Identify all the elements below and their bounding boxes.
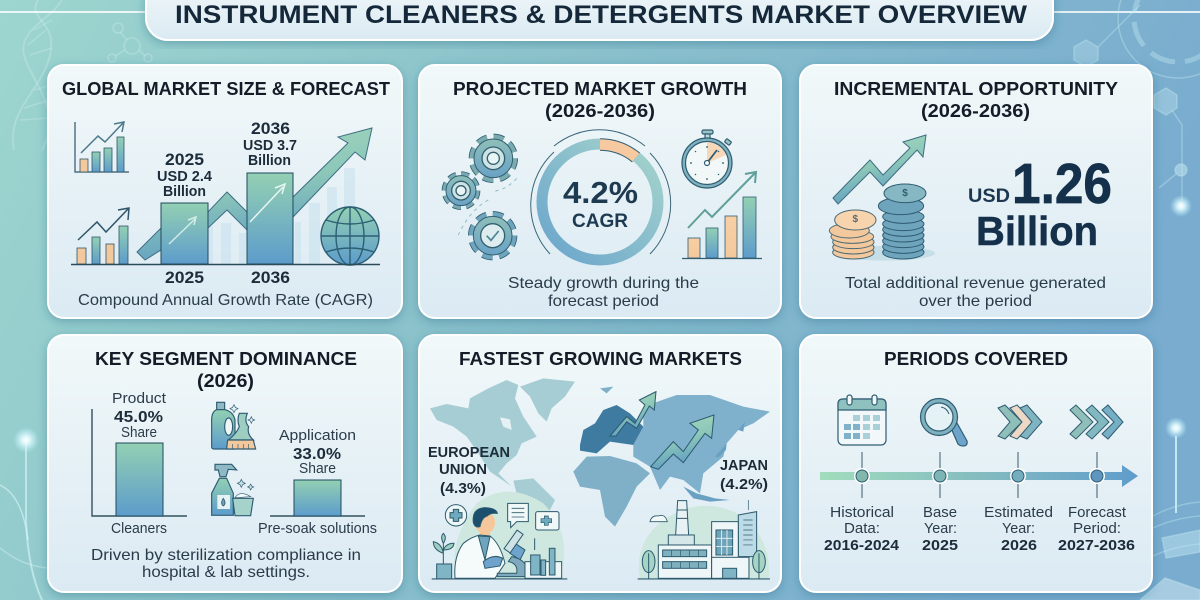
world map [430, 378, 770, 530]
icon: chevrons estimated [998, 405, 1042, 439]
bar chart: application share: Pre-soak solutions [258, 520, 377, 537]
label: European Union: EUROPEAN [428, 444, 510, 461]
axis baseline [71, 264, 380, 266]
icon: coin stacks [829, 184, 935, 261]
icon: globe [321, 207, 379, 265]
label: 2025 value: Billion [163, 183, 206, 200]
label: estimated year: Estimated [984, 504, 1053, 521]
label: forecast period: Forecast [1068, 504, 1127, 521]
label: 2036 value: Billion [248, 152, 291, 169]
heading: (2026-2036) [545, 100, 655, 121]
label: base year: Year: [924, 520, 957, 537]
value: 4.2% CAGR: 4.2% [563, 175, 638, 210]
heading: (2026) [197, 370, 254, 391]
heading: (2026-2036) [921, 100, 1030, 121]
label: forecast period [1058, 504, 1135, 554]
panel: periods covered [800, 335, 1152, 592]
bar 2036 [247, 173, 293, 264]
illustration: factory and city [638, 500, 770, 579]
background decoration: circuit and molecules, right side [1074, 0, 1200, 600]
label: historical data: 2016-2024 [824, 537, 900, 554]
axis labels: 2025 [165, 268, 204, 287]
heading [453, 78, 747, 121]
heading: PROJECTED MARKET GROWTH [453, 78, 747, 99]
label: historical data: Data: [844, 520, 880, 537]
title banner [146, 0, 1053, 40]
value: USD 1.26 Billion [968, 152, 1112, 254]
bar chart: application share: Application [279, 427, 356, 444]
icon: coin stacks: $ [902, 188, 908, 199]
panel: global market size & forecast [48, 65, 402, 318]
heading: GLOBAL MARKET SIZE & FORECAST [62, 78, 391, 99]
value: USD 1.26 Billion: 1.26 [1012, 152, 1112, 216]
heading [95, 348, 357, 391]
label: 2025 value: 2025 [165, 150, 204, 169]
icon: calendar [838, 395, 886, 445]
panel: key segment dominance [48, 335, 402, 592]
bar chart with arrow [682, 172, 762, 258]
background glow dots [13, 195, 1192, 453]
label: 2036 value: 2036 [251, 119, 290, 138]
label: historical data: Historical [830, 504, 894, 521]
arrow: European Union growth [610, 392, 656, 436]
caption: Steady growth during the [508, 275, 699, 292]
label: 2025 value [157, 150, 213, 200]
label: estimated year: 2026 [1001, 537, 1037, 554]
icon: spray bottle and bucket [212, 464, 254, 516]
label: European Union [428, 444, 510, 497]
caption: Driven by sterilization compliance in [91, 547, 361, 564]
icon: coin stacks: $ [853, 214, 859, 225]
label: base year: Base [923, 504, 957, 521]
bar chart: application share: Share [299, 460, 336, 477]
label: 2025 value: USD 2.4 [157, 168, 213, 185]
label: 2036 value [243, 119, 297, 169]
label: European Union: (4.3%) [440, 480, 486, 497]
heading: KEY SEGMENT DOMINANCE [95, 348, 357, 369]
label: forecast period: 2027-2036 [1058, 537, 1135, 554]
label: base year [922, 504, 958, 554]
axis labels: 2036 [251, 268, 290, 287]
background decoration: DNA helix and molecules, top left [13, 0, 152, 150]
caption [91, 547, 361, 581]
label: 2036 value: USD 3.7 [243, 137, 297, 154]
label: base year: 2025 [922, 537, 958, 554]
arrow: Japan growth [651, 415, 714, 469]
icon: chevrons forecast [1070, 405, 1123, 439]
icon: stopwatch [682, 130, 732, 188]
label: historical data [824, 504, 900, 554]
label: Japan [720, 457, 768, 493]
illustration: scientist with microscope [432, 492, 567, 579]
background decoration: glows and lines, left bottom [0, 440, 48, 600]
caption: hospital & lab settings. [142, 564, 310, 581]
caption: Total additional revenue generated [845, 275, 1106, 292]
heading: PERIODS COVERED [884, 348, 1068, 369]
icon: magnifying glass [920, 398, 967, 446]
panel: fastest growing markets [419, 335, 781, 592]
chart: CAGR ring [531, 130, 671, 260]
icon: small bar chart bottom [77, 208, 129, 264]
banner side lines [0, 11, 1200, 13]
bar chart: application share [258, 427, 377, 537]
caption [845, 275, 1106, 310]
arrow: growth [137, 128, 372, 260]
bar chart: application share: 33.0% [293, 446, 341, 463]
label: forecast period: Period: [1073, 520, 1121, 537]
axis labels [165, 268, 290, 287]
caption: forecast period [548, 293, 659, 310]
label: European Union: UNION [439, 461, 487, 478]
icon: gears [445, 138, 517, 256]
heading: INCREMENTAL OPPORTUNITY [834, 78, 1119, 99]
label: estimated year: Year: [1002, 520, 1035, 537]
bar chart: product share: Product [112, 390, 167, 407]
panel: incremental opportunity [800, 65, 1152, 318]
faded background bars [208, 168, 355, 264]
timeline with arrow [820, 452, 1138, 498]
panel: projected market growth [419, 65, 781, 318]
arrow: growth [833, 135, 926, 204]
label: estimated year [984, 504, 1053, 554]
bar chart: product share: Share [121, 424, 157, 441]
caption [508, 275, 699, 310]
title: INSTRUMENT CLEANERS & DETERGENTS MARKET OVERVIEW [175, 1, 1027, 29]
bar chart: product share: 45.0% [114, 409, 163, 426]
label: Japan: (4.2%) [720, 476, 768, 493]
value: 4.2% CAGR [563, 175, 638, 232]
heading: FASTEST GROWING MARKETS [459, 348, 742, 369]
bar chart: product share: Cleaners [111, 520, 167, 537]
icon: small bar chart top [75, 122, 129, 172]
value: 4.2% CAGR: CAGR [572, 211, 628, 232]
heading [834, 78, 1119, 121]
value: USD 1.26 Billion: USD [968, 186, 1010, 207]
bar 2025 [161, 203, 208, 264]
caption: over the period [919, 293, 1032, 310]
bar chart: product share [92, 390, 187, 537]
value: USD 1.26 Billion: Billion [976, 208, 1098, 254]
caption: Compound Annual Growth Rate (CAGR) [78, 292, 373, 309]
label: Japan: JAPAN [720, 457, 768, 474]
icon: detergent bottle and brush [212, 402, 256, 449]
